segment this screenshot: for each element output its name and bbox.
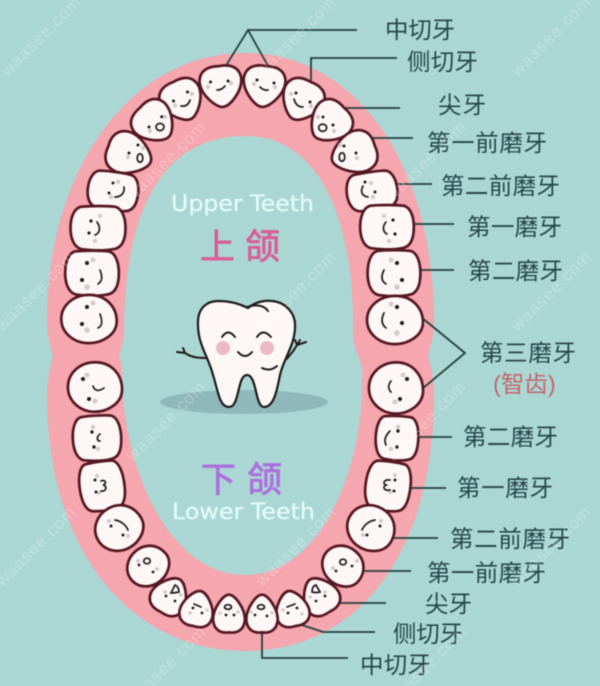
mascot: smiling tooth [160,301,328,414]
labels: upper jaw: 侧切牙 [407,49,478,75]
upper left second molar [65,251,119,296]
lower right canine [295,570,345,621]
labels: lower jaw: 第一磨牙 [457,475,553,501]
labels: upper jaw: 第一前磨牙 [427,130,547,156]
upper right lateral incisor [274,73,330,128]
watermark: waasee.com [121,117,210,206]
watermark: waasee.com [381,377,470,466]
upper right central incisor [241,64,287,109]
labels: upper jaw: 尖牙 [438,92,486,118]
labels: lower jaw: 侧切牙 [393,621,463,647]
upper left first premolar [101,127,158,182]
watermark: waasee.com [121,377,210,466]
lower left third molar [68,362,122,412]
watermark: waasee.com [251,247,340,336]
watermark: waasee.com [506,502,595,591]
labels: lower jaw: 第二前磨牙 [450,526,570,552]
lower left second premolar [87,497,151,559]
lower right third molar [369,362,423,414]
lower right first premolar [314,537,372,595]
watermark: waasee.com [251,502,340,591]
lower teeth [68,362,423,633]
heading: upper jaw: 上 [200,228,235,267]
heading: Upper Teeth: Upper Teeth [171,192,314,217]
heading: lower jaw: 颌 [247,461,282,500]
heading: lower jaw: 下 [201,461,236,500]
upper left second premolar [85,169,141,214]
watermark: waasee.com [506,247,595,336]
lower left second molar [72,414,122,462]
upper left canine [125,93,184,152]
labels: lower jaw [360,424,570,678]
labels: lower jaw: 中切牙 [360,652,431,678]
labels: upper jaw: 中切牙 [385,17,455,43]
label: third molar: 第三磨牙 [480,340,576,366]
upper right third molar [367,296,423,344]
labels: upper jaw: 第二前磨牙 [441,173,560,199]
upper teeth [61,64,423,344]
upper left first molar [70,206,126,250]
watermark: waasee.com [381,117,470,206]
lower left first molar [76,459,128,514]
upper left lateral incisor [154,73,210,128]
heading: Lower Teeth: Lower Teeth [172,500,315,525]
lower left lateral incisor [177,588,217,630]
lower right first molar [362,459,414,514]
upper right second molar [368,250,420,296]
gum: pink dental arches [47,53,434,651]
lower right lateral incisor [272,588,312,630]
lower right second premolar [339,497,403,559]
labels: lower jaw: 第一前磨牙 [427,560,546,586]
labels: upper jaw [385,17,563,284]
lower right central incisor [246,595,278,633]
lower left central incisor [213,595,245,633]
label: third molar [480,340,576,397]
lower left canine [145,570,195,621]
labels: lower jaw: 第二磨牙 [463,424,558,450]
upper right second premolar [344,169,400,214]
labels: lower jaw: 尖牙 [425,591,472,617]
upper left central incisor [198,64,244,109]
label: third molar: (智齿) [493,371,556,397]
upper left third molar [61,295,117,343]
lower right second molar [375,415,419,462]
lower left first premolar [119,537,177,595]
labels: upper jaw: 第一磨牙 [467,214,562,240]
upper right first premolar [325,126,382,181]
labels: upper jaw: 第二磨牙 [468,258,563,284]
heading: upper jaw: 颌 [245,228,280,267]
upper right first molar [360,205,414,249]
upper right canine [300,93,359,152]
leader lines [227,30,465,658]
